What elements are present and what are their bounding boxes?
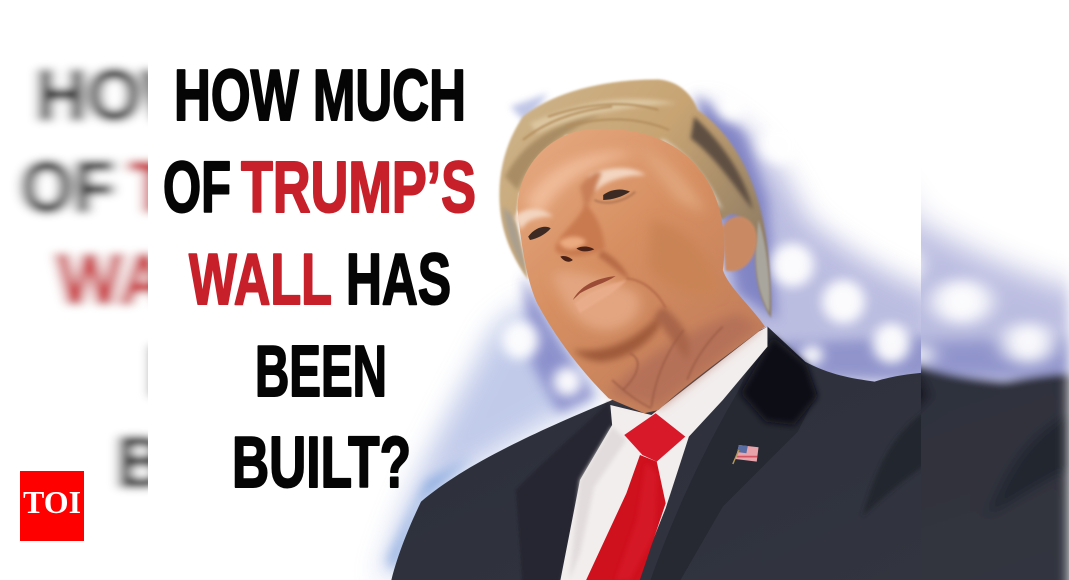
line: been: BEEN xyxy=(255,332,387,412)
eyes and brows xyxy=(589,168,646,192)
blurred stretched background: BUILT? xyxy=(116,422,364,503)
lapels xyxy=(646,327,817,580)
line: of: OF xyxy=(163,148,231,228)
logo: TOI xyxy=(20,471,84,541)
line: wall: WALL xyxy=(189,240,332,320)
bokeh stars xyxy=(501,93,910,396)
blurred stretched background: HAS xyxy=(274,239,419,320)
title: how much of Trump's wall has been built? xyxy=(163,56,476,503)
line: has: HAS xyxy=(346,240,451,320)
central panel xyxy=(148,63,921,580)
flag pin xyxy=(733,445,759,464)
line: how much: HOW MUCH xyxy=(174,56,466,136)
shirt and collar xyxy=(558,327,767,580)
nose xyxy=(555,203,605,256)
ear xyxy=(722,216,757,271)
logo: TOI: TOI xyxy=(23,484,81,520)
suit xyxy=(389,327,937,580)
blurred stretched background: BEEN xyxy=(148,331,331,412)
blurred stretched background: OF xyxy=(21,147,115,228)
neck creases xyxy=(612,327,723,408)
tie xyxy=(580,413,685,580)
blurred stretched background: HOW MUCH xyxy=(36,55,440,136)
face and neck xyxy=(514,129,765,413)
portrait with bokeh backdrop xyxy=(380,79,937,580)
hair xyxy=(499,79,771,318)
mouth xyxy=(573,276,616,300)
line: built?: BUILT? xyxy=(232,423,411,503)
backdrop glow xyxy=(380,93,937,580)
blurred stretched background: WALL xyxy=(57,239,254,320)
blurred stretched background: TRUMP’S xyxy=(129,147,454,228)
line: Trump's: TRUMP’S xyxy=(241,148,476,228)
